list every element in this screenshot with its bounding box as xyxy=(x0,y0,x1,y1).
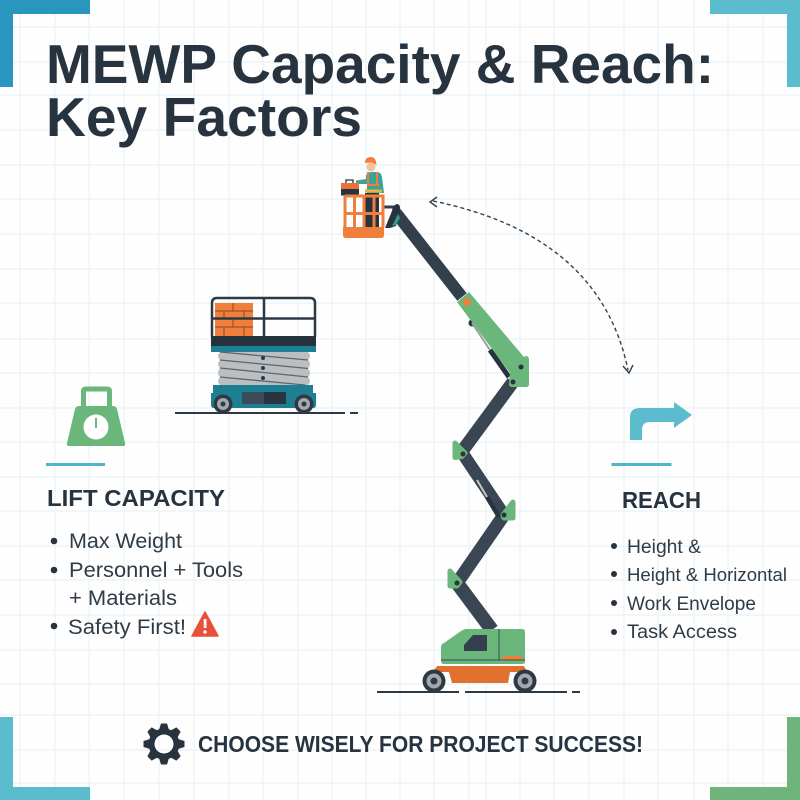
torso and arm xyxy=(356,172,384,193)
bullet list: Safety First! xyxy=(68,616,186,639)
footer text: CHOOSE WISELY FOR PROJECT SUCCESS! xyxy=(198,731,643,757)
bullet list: Personnel + Tools xyxy=(69,559,243,582)
basket bracket xyxy=(384,204,400,228)
heading: LIFT CAPACITY xyxy=(47,485,225,511)
bullet list: Height & Horizontal xyxy=(627,564,787,585)
corner bracket: bottom left xyxy=(0,717,90,800)
icon: warning triangle xyxy=(192,612,218,636)
tool belt xyxy=(365,190,382,192)
joint pins xyxy=(454,452,506,586)
harness xyxy=(367,172,379,185)
panel: lift capacity xyxy=(46,389,243,639)
bullet list xyxy=(51,530,243,639)
cab xyxy=(441,629,525,664)
bullet list: Work Envelope xyxy=(627,594,756,615)
wheels xyxy=(422,670,536,692)
upper boom, green section xyxy=(457,292,529,387)
heading: REACH xyxy=(622,487,701,513)
corner bracket: top left xyxy=(0,0,90,87)
illustration: articulated boom lift xyxy=(341,157,580,692)
corner bracket: top right xyxy=(710,0,800,87)
ground line xyxy=(175,412,358,414)
worker xyxy=(356,157,384,227)
ground line xyxy=(377,691,580,693)
bricks xyxy=(215,303,253,336)
chassis xyxy=(211,385,316,408)
legs xyxy=(365,193,379,227)
wheels xyxy=(214,394,314,414)
upper cylinder xyxy=(468,320,509,377)
title: MEWP Capacity & Reach: xyxy=(46,33,714,95)
bullet list: + Materials xyxy=(69,587,177,610)
upper boom, dark section xyxy=(396,213,462,297)
bullet list: Height & xyxy=(627,537,701,558)
icon: turn arrow xyxy=(630,402,692,440)
platform xyxy=(211,336,316,352)
title: Key Factors xyxy=(46,86,362,148)
panel: reach xyxy=(611,402,787,643)
bullet list: Task Access xyxy=(627,622,737,643)
head xyxy=(366,162,376,172)
lower boom sections xyxy=(457,382,513,630)
icon: weight xyxy=(67,389,125,446)
bullet list: Max Weight xyxy=(69,530,182,553)
toolbox xyxy=(341,180,359,196)
corner bracket: bottom right xyxy=(710,717,800,800)
guard rail xyxy=(212,298,315,337)
footer callout xyxy=(144,724,643,764)
bullet list xyxy=(611,537,787,643)
orange base xyxy=(433,666,527,683)
elbow joints xyxy=(450,443,513,586)
lower cylinder xyxy=(477,480,499,517)
basket xyxy=(343,196,384,238)
scissor stack xyxy=(218,352,310,385)
arrow: dashed reach arc xyxy=(430,197,633,373)
illustration: scissor lift with bricks xyxy=(175,298,358,414)
icon: gear xyxy=(144,724,184,764)
hard hat xyxy=(365,157,376,165)
